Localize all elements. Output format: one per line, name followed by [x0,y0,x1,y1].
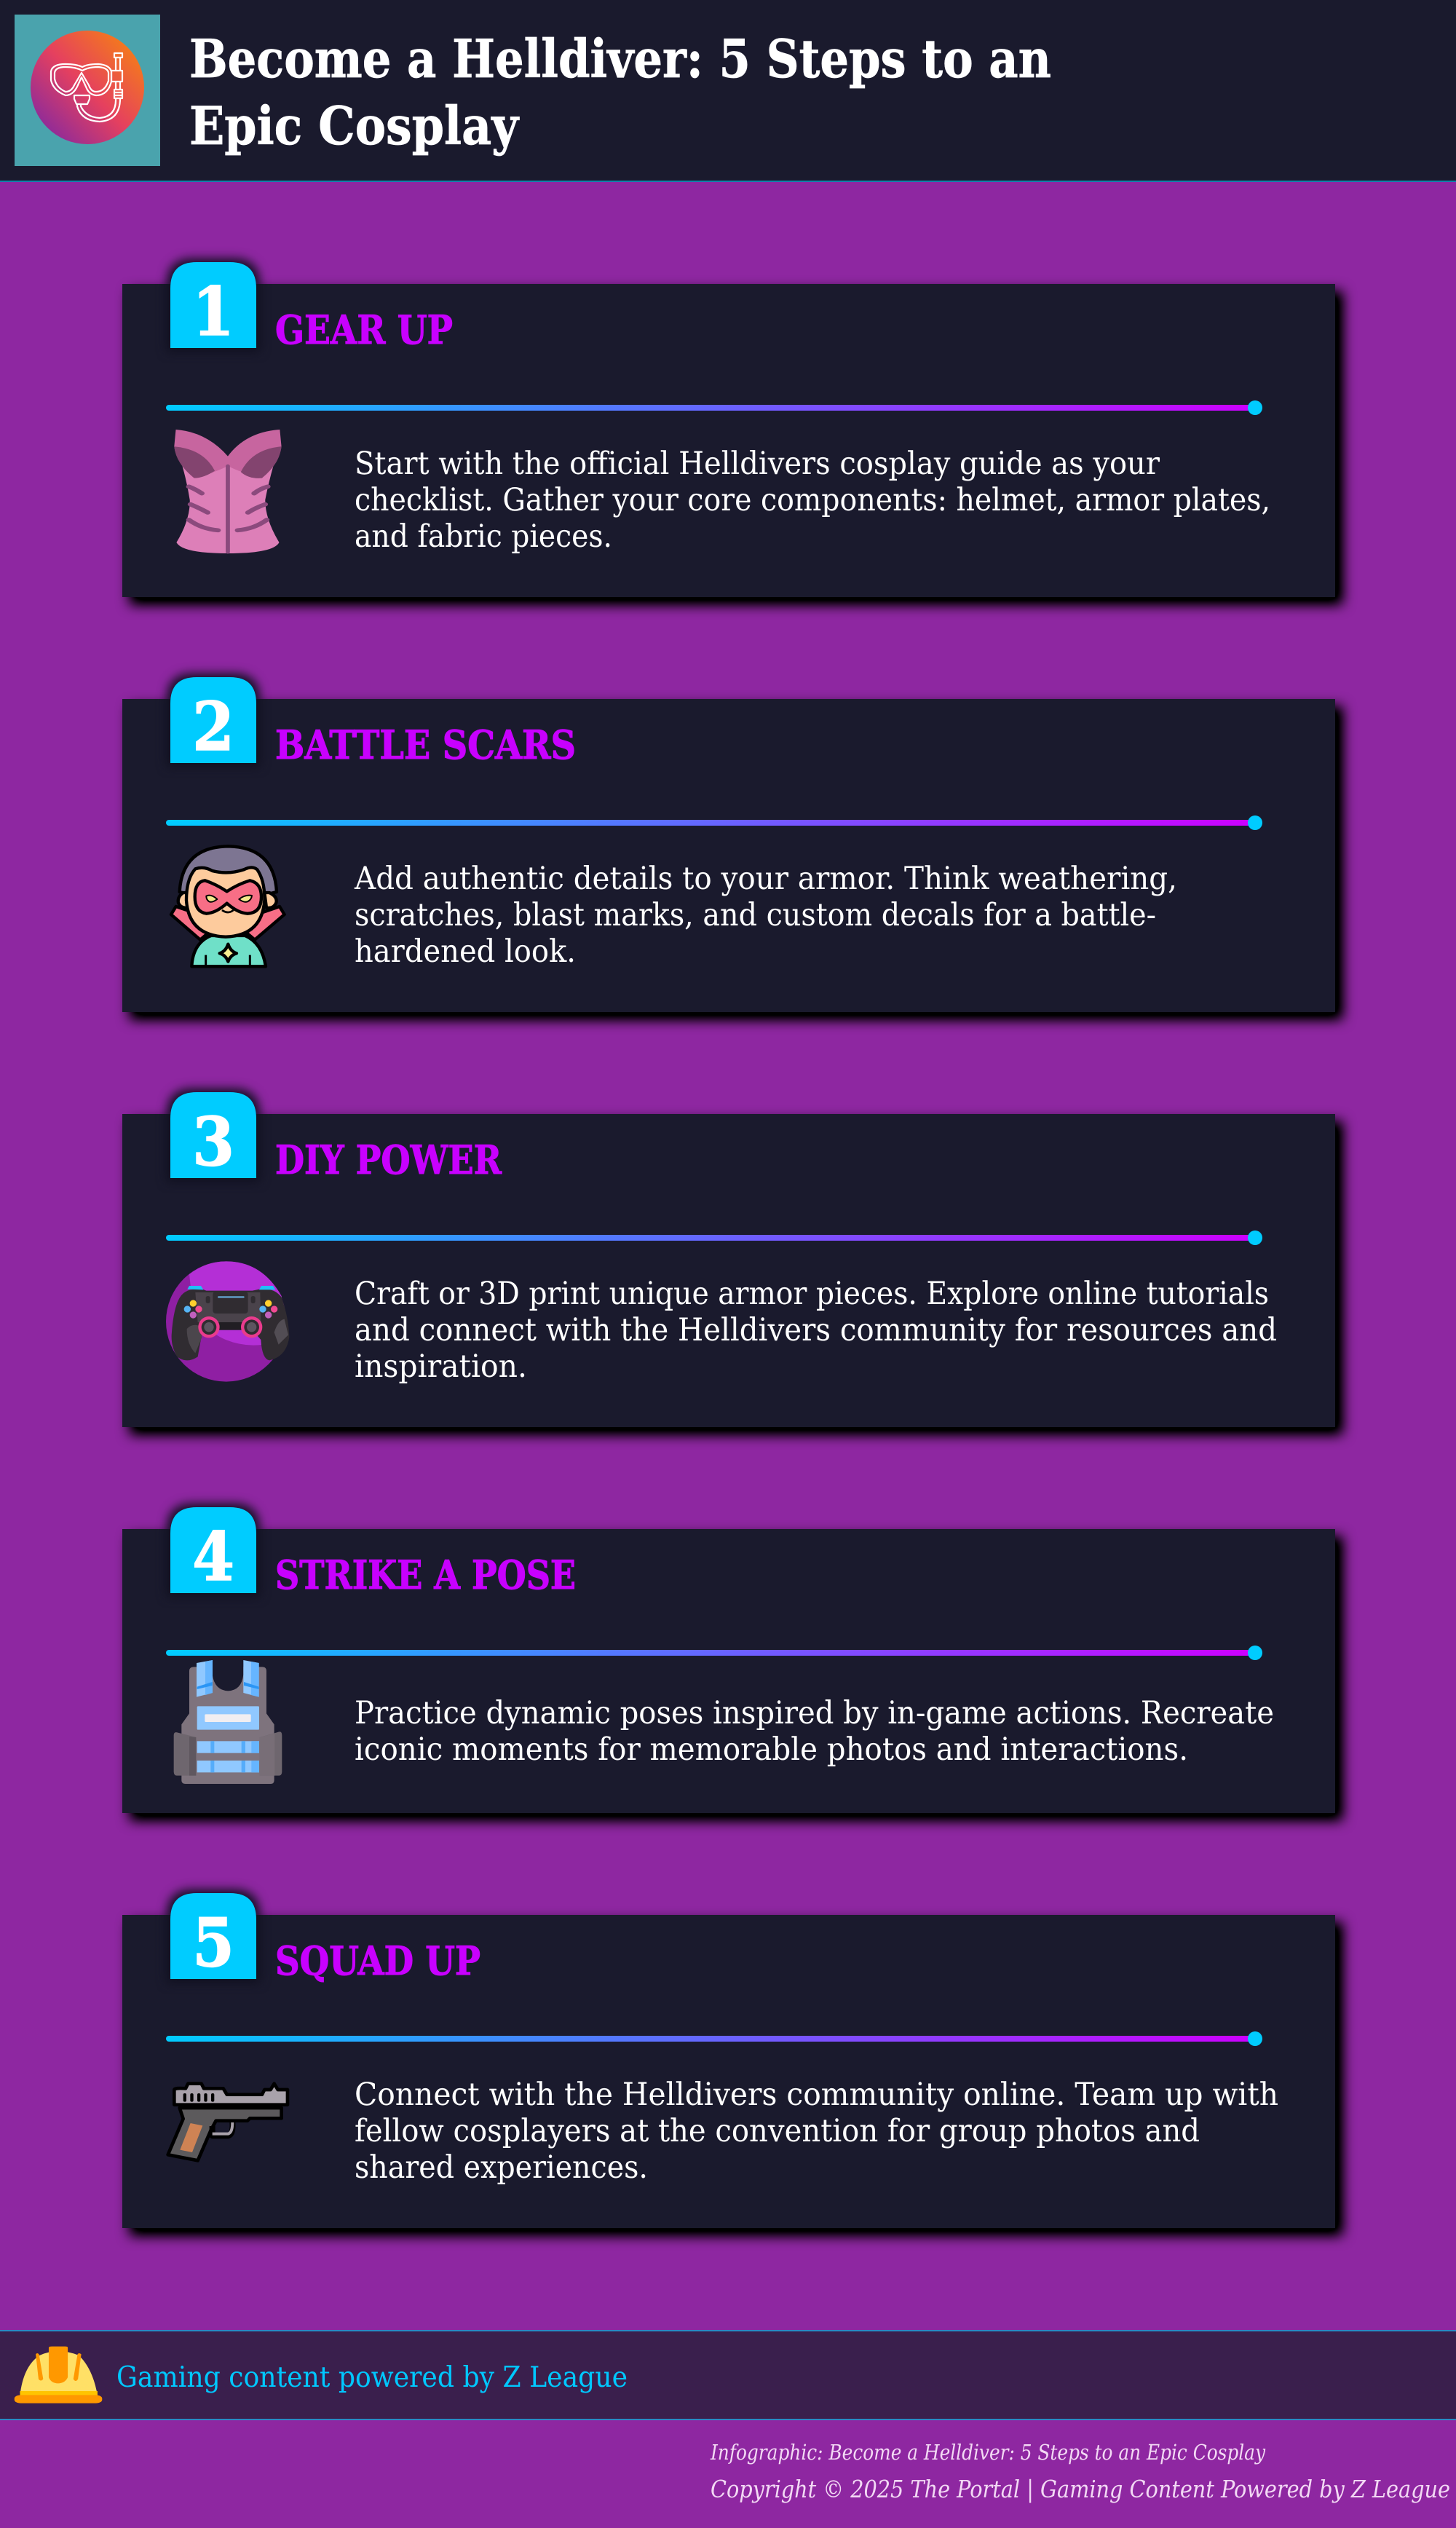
heading: GEAR UP [275,307,453,353]
body text [355,1276,1277,1385]
number badge 4: 4 [192,1517,234,1596]
panel: step 4 strike a pose [122,1507,1335,1813]
body text: shared experiences. [355,2149,648,2186]
body text: scratches, blast marks, and custom decals for a battle- [355,897,1156,933]
body text: and connect with the Helldivers community for resources and [355,1312,1277,1348]
divider with end dot [166,2031,1262,2046]
body text: Connect with the Helldivers community online. Team up with [355,2077,1278,2113]
icon: masked hero [171,846,285,966]
panel: step 5 squad up [122,1893,1335,2228]
body text: hardened look. [355,933,576,970]
body text: Start with the official Helldivers cosplay guide as your [355,446,1160,482]
icon: hard hat [15,2347,102,2403]
heading: SQUAD UP [275,1938,480,1984]
number badge 4 [170,1507,256,1596]
body text: Practice dynamic poses inspired by in-game actions. Recreate [355,1695,1274,1731]
body text: iconic moments for memorable photos and interactions. [355,1731,1188,1768]
panel: step 1 gear up [122,262,1335,597]
number badge 3: 3 [192,1102,234,1181]
number badge 5: 5 [192,1903,234,1982]
number badge 2: 2 [192,687,234,766]
number badge 5 [170,1893,256,1982]
panel: step 2 battle scars [122,677,1335,1012]
footer credits: Copyright © 2025 The Portal | Gaming Content Powered by Z League [711,2475,1450,2503]
body text: Craft or 3D print unique armor pieces. Explore online tutorials [355,1276,1269,1312]
body text [355,1695,1274,1768]
number badge 1 [170,262,256,351]
body text [355,2077,1278,2186]
footer credits: Infographic: Become a Helldiver: 5 Steps to an Epic Cosplay [710,2440,1266,2465]
body text: inspiration. [355,1348,527,1385]
footer credits [710,2440,1450,2503]
body text: checklist. Gather your core components: helmet, armor plates, [355,482,1270,518]
heading: STRIKE A POSE [275,1552,576,1598]
heading: DIY POWER [275,1137,502,1183]
number badge 2 [170,677,256,766]
title [189,28,1051,157]
number badge 1: 1 [192,272,234,351]
body text: fellow cosplayers at the convention for group photos and [355,2113,1200,2149]
panel: step 3 diy power [122,1092,1335,1427]
title: Epic Cosplay [189,95,520,157]
icon: armor vest [174,1660,282,1784]
icon: snorkel mask logo [15,15,160,166]
body text [354,861,1177,970]
divider with end dot [166,400,1262,415]
body text: and fabric pieces. [355,518,612,555]
divider with end dot [166,1231,1262,1245]
body text [355,446,1270,555]
icon: corset [174,430,282,553]
footer brand text: Gaming content powered by Z League [116,2361,628,2394]
footer band [0,2330,1456,2420]
divider with end dot [166,815,1262,830]
header [0,0,1456,182]
icon: pistol [168,2084,288,2160]
divider with end dot [166,1646,1262,1660]
number badge 3 [170,1092,256,1181]
body text: Add authentic details to your armor. Think weathering, [354,861,1177,897]
icon: game controller [166,1261,289,1382]
title: Become a Helldiver: 5 Steps to an [189,28,1051,90]
heading: BATTLE SCARS [275,722,576,768]
